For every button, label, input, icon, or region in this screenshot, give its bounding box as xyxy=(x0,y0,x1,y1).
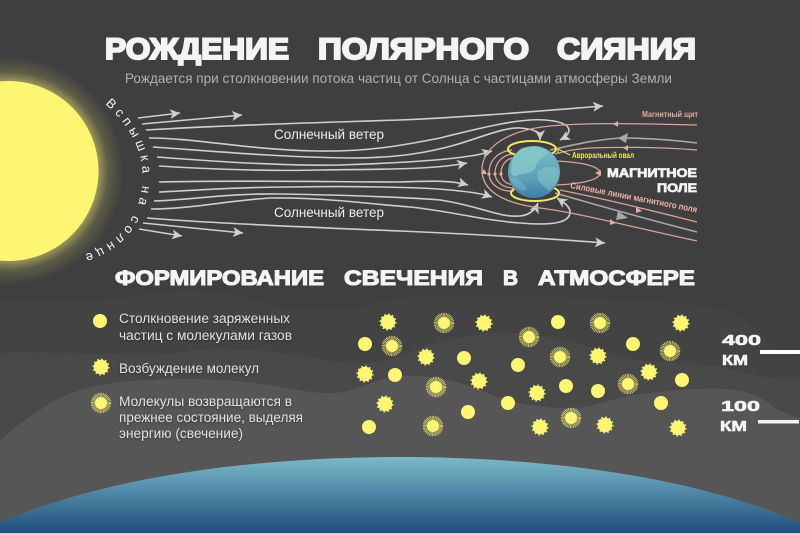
legend text: collision: частиц с молекулами газов xyxy=(119,328,292,343)
label: auroral oval xyxy=(558,149,634,160)
section heading: АТМОСФЕРЕ xyxy=(538,267,695,290)
legend icon: glow xyxy=(93,395,109,411)
altitude marker: 100 km: КМ xyxy=(720,418,747,435)
subtitle: Рождается при столкновении потока частиц от Солнца с частицами атмосферы Земли xyxy=(125,71,672,86)
section heading: СВЕЧЕНИЯ xyxy=(344,267,483,290)
title: ПОЛЯРНОГО xyxy=(318,33,529,66)
curved label: solar flare: Вспышка на солнце xyxy=(86,98,150,260)
label: magnetic field lines: Силовые линии магнитного поля xyxy=(570,180,698,215)
legend text: collision xyxy=(119,311,292,343)
magnetic field lines xyxy=(481,121,697,241)
legend text: excitation: Возбуждение молекул xyxy=(119,361,259,376)
label: solar wind bottom: Солнечный ветер xyxy=(274,204,384,220)
icon: earth globe xyxy=(508,146,560,198)
label: magnetic field: ПОЛЕ xyxy=(657,181,697,195)
sun xyxy=(0,57,124,285)
legend text: glow xyxy=(119,394,303,441)
altitude marker: 400 km: КМ xyxy=(722,352,748,369)
label: magnetic field: МАГНИТНОЕ xyxy=(607,166,697,180)
section heading: В xyxy=(503,267,518,290)
label: solar wind top: Солнечный ветер xyxy=(274,126,384,142)
legend xyxy=(93,311,303,441)
altitude marker: 100 km: 100 xyxy=(721,398,760,415)
altitude marker: 400 km xyxy=(722,332,800,369)
earth surface xyxy=(0,457,800,533)
altitude marker: 400 km: 400 xyxy=(722,332,761,349)
solar wind lines xyxy=(138,106,605,243)
legend icon: excitation xyxy=(93,359,109,375)
label: auroral oval: Авроральный овал xyxy=(572,151,634,160)
label: magnetic shield: Магнитный щит xyxy=(642,110,698,119)
molecules: excited xyxy=(357,314,689,436)
section heading xyxy=(115,267,695,290)
title xyxy=(105,33,696,66)
title: РОЖДЕНИЕ xyxy=(105,33,289,66)
title: СИЯНИЯ xyxy=(557,33,696,66)
label: magnetic field xyxy=(607,166,697,195)
auroral oval back xyxy=(508,141,559,201)
legend text: glow: энергию (свечение) xyxy=(119,426,243,441)
legend text: collision: Столкновение заряженных xyxy=(119,311,290,326)
section heading: ФОРМИРОВАНИЕ xyxy=(115,267,324,290)
molecules: collision xyxy=(358,315,689,434)
legend text: glow: Молекулы возвращаются в xyxy=(119,394,292,409)
legend text: glow: прежнее состояние, выделяя xyxy=(119,410,303,425)
molecules: glowing xyxy=(384,315,678,434)
legend icon: collision xyxy=(93,314,107,328)
atmosphere layer: lower xyxy=(0,376,800,533)
atmosphere layer: upper xyxy=(0,291,800,533)
altitude marker: 100 km xyxy=(720,398,799,435)
atmosphere layer: middle xyxy=(0,333,800,533)
